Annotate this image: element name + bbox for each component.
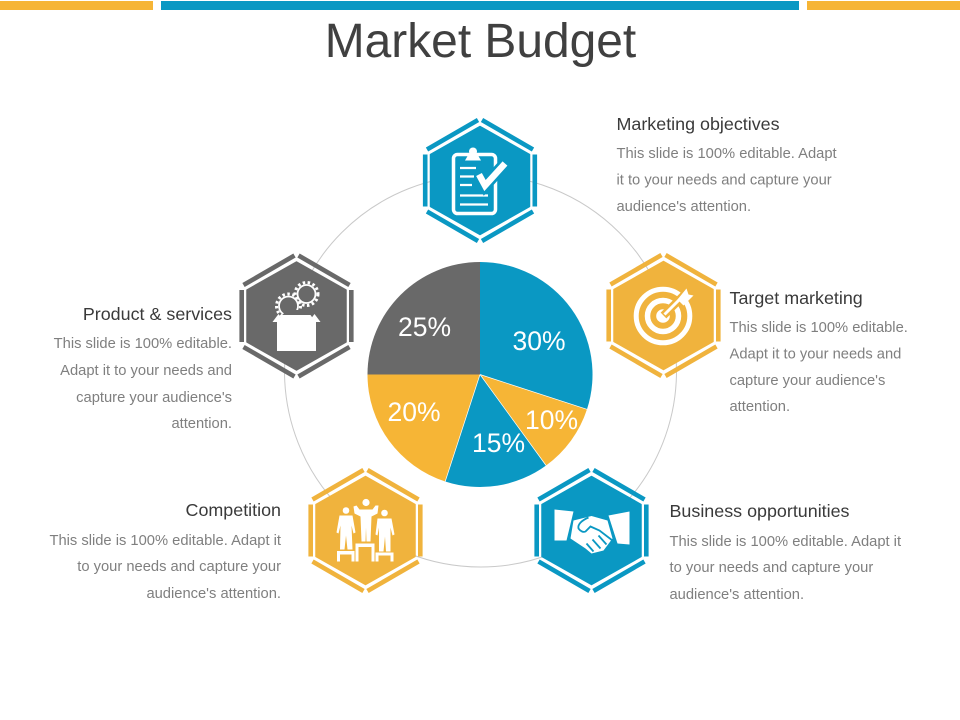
text block: competition: audience's attention. [146,586,281,602]
text block: target marketing: Target marketing [730,288,863,308]
text block: marketing objectives [616,114,837,215]
connecting ring [284,175,676,567]
top bar [0,1,960,10]
text block: product and services: This slide is 100% editable. [54,336,232,352]
pie chart [367,262,593,487]
text block: target marketing: capture your audience's [730,373,885,389]
text block: business opportunities: Business opportunities [670,501,850,521]
pie label 25%: 25% [398,312,451,342]
hexagon: business opportunities [537,470,646,591]
icon: handshake [554,510,630,554]
text block: product and services: capture your audience's [76,390,232,406]
text block: target marketing: Adapt it to your needs and [730,346,901,362]
icon: target [636,288,694,343]
text block: business opportunities: audience's attention. [670,587,804,603]
text block: competition: This slide is 100% editable. Adapt it [49,533,281,549]
text block: marketing objectives: audience's attention. [616,199,751,215]
pie label 15%: 15% [472,428,525,458]
text block: target marketing [730,288,908,415]
text block: marketing objectives: it to your needs and capture your [616,172,832,188]
text block: target marketing: attention. [730,399,790,415]
text block: competition [49,500,281,602]
title: Market Budget [325,15,636,68]
text block: business opportunities: This slide is 100% editable. Adapt it [670,534,901,550]
text block: product and services: attention. [171,416,232,432]
text block: marketing objectives: Marketing objectives [616,114,780,134]
hexagon: target marketing [609,255,718,376]
text block: product and services: Adapt it to your needs and [60,363,232,379]
text block: product and services: Product & services [83,304,232,324]
pie label 30%: 30% [512,326,566,356]
icon: podium figures [336,499,394,562]
text block: target marketing: This slide is 100% editable. [730,320,908,336]
icon: box with gears [272,282,320,351]
text block: competition: Competition [186,500,281,520]
pie label 20%: 20% [387,397,441,427]
hexagon: marketing objectives [425,120,535,241]
text block: competition: to your needs and capture your [77,559,281,575]
text block: business opportunities [670,501,901,603]
pie label 10%: 10% [525,405,578,435]
icon: clipboard [454,148,505,214]
text block: business opportunities: to your needs and capture your [670,560,873,576]
hexagon: competition [311,470,420,591]
text block: marketing objectives: This slide is 100% editable. Adapt [616,146,837,162]
text block: product and services [54,304,232,432]
hexagon: product and services [242,256,351,376]
